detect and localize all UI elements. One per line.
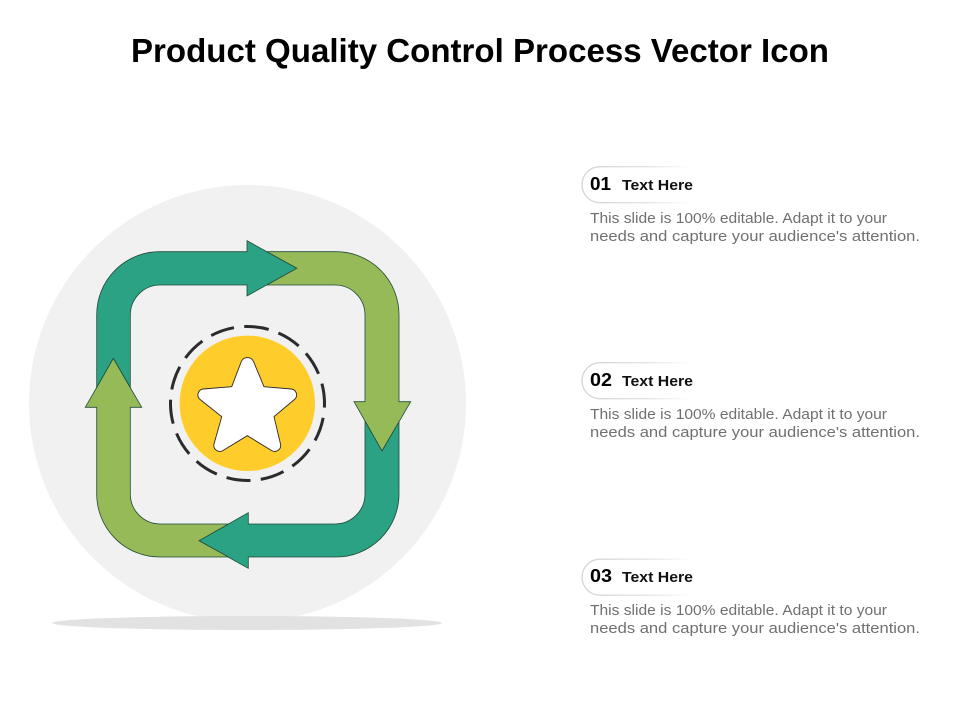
arrow: green bottom left [85,358,228,557]
item 02 [582,363,920,441]
pill outline [582,167,692,203]
ground shadow [52,616,442,630]
number: 02 [590,369,612,390]
heading: Text Here [622,569,693,586]
arrow: teal top left [97,241,297,388]
number: 03 [590,565,612,586]
pill outline [582,559,692,595]
gold circle [180,336,315,471]
item 03 [582,559,920,637]
pill outline [582,363,692,399]
description [590,603,920,637]
background circle [29,185,466,622]
heading: Text Here [622,177,693,194]
arrow: green top right [267,252,411,451]
description [590,407,920,441]
dashed ring [168,324,327,483]
description [590,211,920,245]
description: needs and capture your audience's attention. [590,425,920,441]
description: needs and capture your audience's attention. [590,229,920,245]
description: This slide is 100% editable. Adapt it to your [590,407,887,423]
cycle arrows [85,241,411,568]
number: 01 [590,173,611,194]
icon: star [198,358,297,451]
description: needs and capture your audience's attention. [590,621,920,637]
item 01 [582,167,920,245]
heading: Text Here [622,373,693,390]
description: This slide is 100% editable. Adapt it to your [590,211,887,227]
description: This slide is 100% editable. Adapt it to your [590,603,887,619]
arrow: teal right bottom [199,421,399,568]
title: Product Quality Control Process Vector Icon [131,32,829,69]
